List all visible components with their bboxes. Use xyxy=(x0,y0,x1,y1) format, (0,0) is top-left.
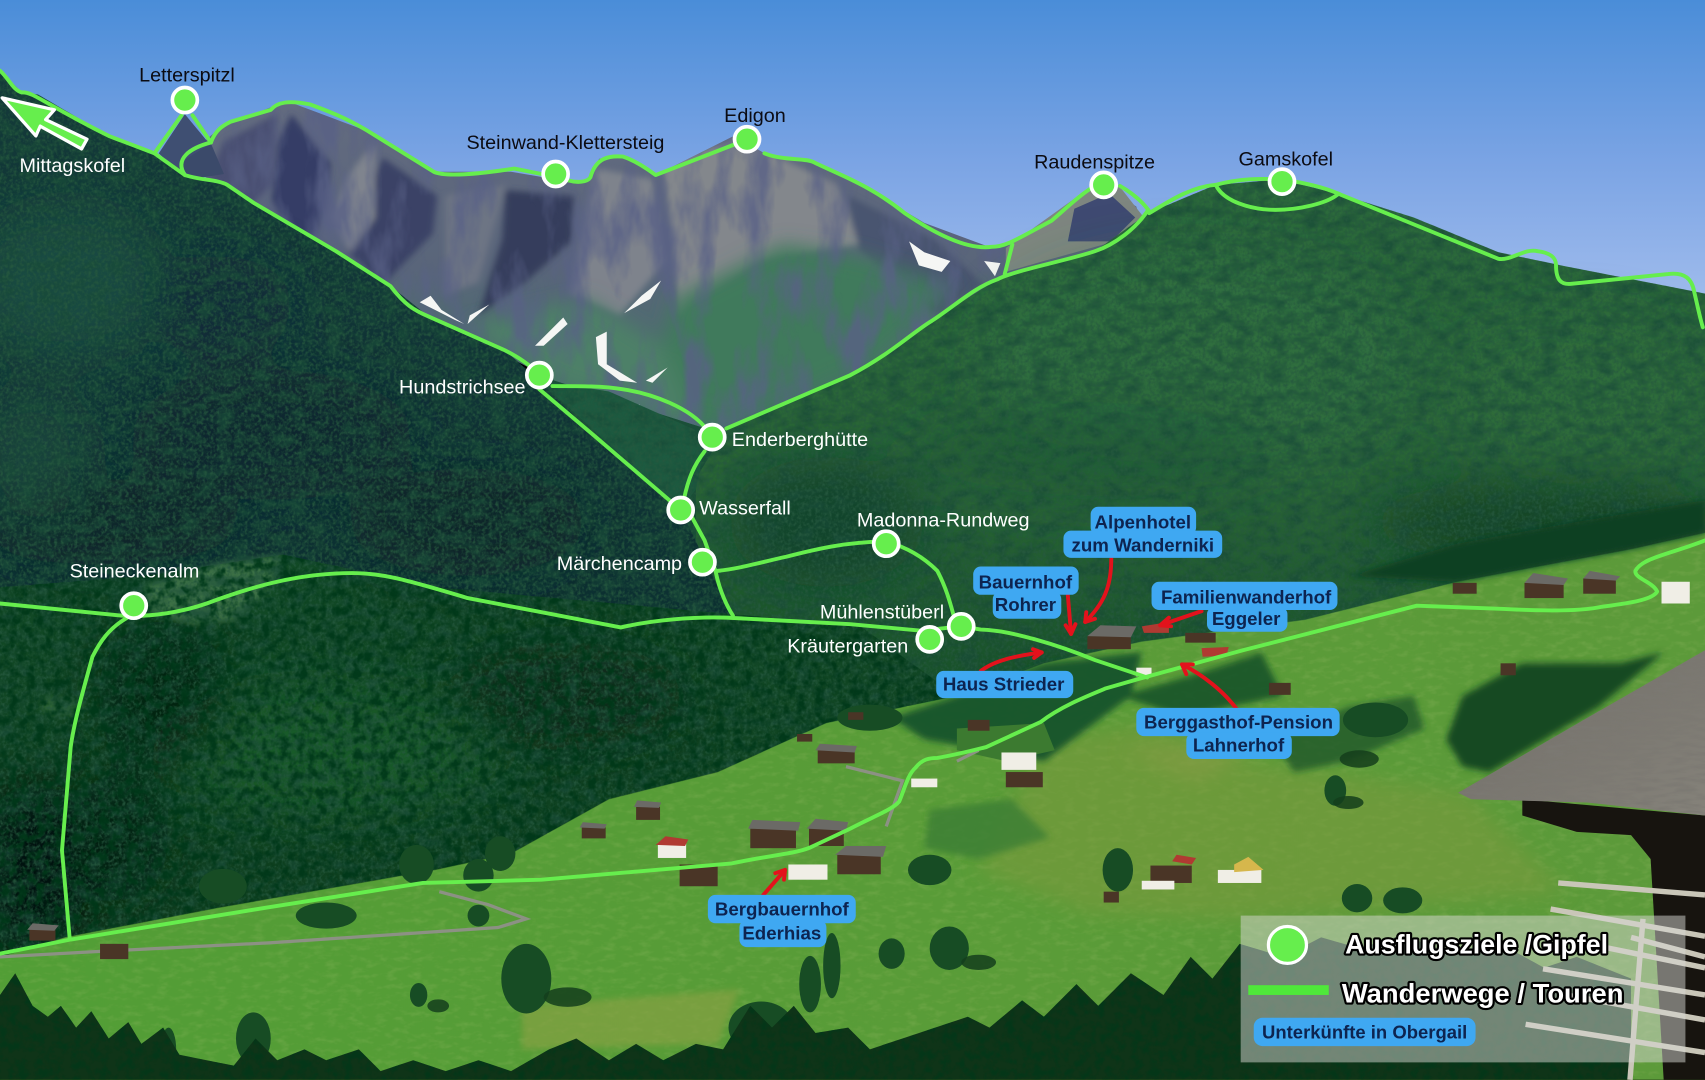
legend: trails text: Wanderwege / Touren xyxy=(1342,979,1623,1009)
tree shadows xyxy=(427,750,1379,1012)
accommodation: Alpenhotel zum Wanderniki xyxy=(1063,507,1222,558)
accommodation: Bauernhof Rohrer xyxy=(973,567,1079,619)
farmhouse roof and timber xyxy=(1457,647,1705,1080)
forest patches on the slope xyxy=(892,500,1705,859)
destination labels: Madonna-Rundweg xyxy=(857,509,1030,531)
left mountain forest xyxy=(0,71,734,696)
red pointers xyxy=(763,559,1237,895)
legend: accommodation swatch xyxy=(1254,1018,1476,1046)
accommodation: Bergbauernhof Ederhias: Bergbauernhof xyxy=(715,899,850,920)
base valley ground xyxy=(0,370,1705,750)
accommodation: Familienwanderhof Eggeler xyxy=(1152,582,1337,632)
peak labels: Gamskofel xyxy=(1239,148,1333,170)
accommodation: Haus Strieder: Haus Strieder xyxy=(943,673,1064,694)
legend: destinations text: Ausflugsziele /Gipfel xyxy=(1345,930,1608,960)
accommodation: Berggasthof-Pension Lahnerhof: Berggasthof-Pension xyxy=(1144,712,1333,733)
meadow trees xyxy=(161,702,1422,1071)
foreground conifers xyxy=(0,924,1642,1080)
farm buildings xyxy=(27,571,1690,959)
snow patches xyxy=(420,241,1000,426)
peak labels xyxy=(139,65,1333,174)
peak labels: Raudenspitze xyxy=(1034,152,1155,174)
slope below the rock xyxy=(539,381,707,510)
rocky massif xyxy=(206,104,1137,430)
destination labels: Mittagskofel xyxy=(20,155,125,177)
accommodation: Familienwanderhof Eggeler: Familienwanderhof xyxy=(1161,587,1332,608)
Raudenspitze and Letterspitzl peaks xyxy=(159,114,1144,272)
destination labels xyxy=(20,155,1030,657)
accommodation: Berggasthof-Pension Lahnerhof: Lahnerhof xyxy=(1193,734,1285,755)
destination labels: Enderberghütte xyxy=(732,429,868,451)
accommodation: Bauernhof Rohrer: Rohrer xyxy=(995,594,1056,615)
legend: trail swatch xyxy=(1248,985,1329,995)
accommodation: Berggasthof-Pension Lahnerhof xyxy=(1136,708,1340,759)
peak labels: Letterspitzl xyxy=(139,65,235,87)
destination labels: Mühlenstüberl xyxy=(820,602,944,624)
peak labels: Steinwand-Klettersteig xyxy=(466,132,664,154)
peak labels: Edigon xyxy=(724,105,786,127)
forest light and shadow xyxy=(0,207,1705,957)
accommodation: Haus Strieder xyxy=(936,671,1073,698)
destination labels: Kräutergarten xyxy=(787,635,908,657)
arrow to Mittagskofel xyxy=(2,98,87,149)
accommodation: Alpenhotel zum Wanderniki: Alpenhotel xyxy=(1095,511,1191,532)
destination markers xyxy=(121,88,1295,652)
dark conifer texture in lower forest xyxy=(0,544,979,968)
legend: accommodation swatch: Unterkünfte in Obergail xyxy=(1262,1021,1467,1042)
road xyxy=(0,750,979,957)
accommodation: Alpenhotel zum Wanderniki: zum Wanderniki xyxy=(1072,534,1214,555)
accommodation: Familienwanderhof Eggeler: Eggeler xyxy=(1212,608,1280,629)
alpine meadows xyxy=(0,533,1705,1080)
accommodation: Bergbauernhof Ederhias xyxy=(708,895,856,947)
sky xyxy=(0,0,1705,326)
lower valley forest xyxy=(0,555,957,957)
accommodation: Bergbauernhof Ederhias: Ederhias xyxy=(742,923,821,944)
destination labels: Hundstrichsee xyxy=(399,377,526,399)
destination labels: Märchencamp xyxy=(557,553,682,575)
destination labels: Steineckenalm xyxy=(70,560,199,582)
legend xyxy=(1241,916,1685,1062)
accommodation: Bauernhof Rohrer: Bauernhof xyxy=(979,571,1073,592)
destination labels: Wasserfall xyxy=(699,497,791,519)
right mountain forest xyxy=(696,179,1705,696)
legend: destination marker xyxy=(1268,926,1306,963)
